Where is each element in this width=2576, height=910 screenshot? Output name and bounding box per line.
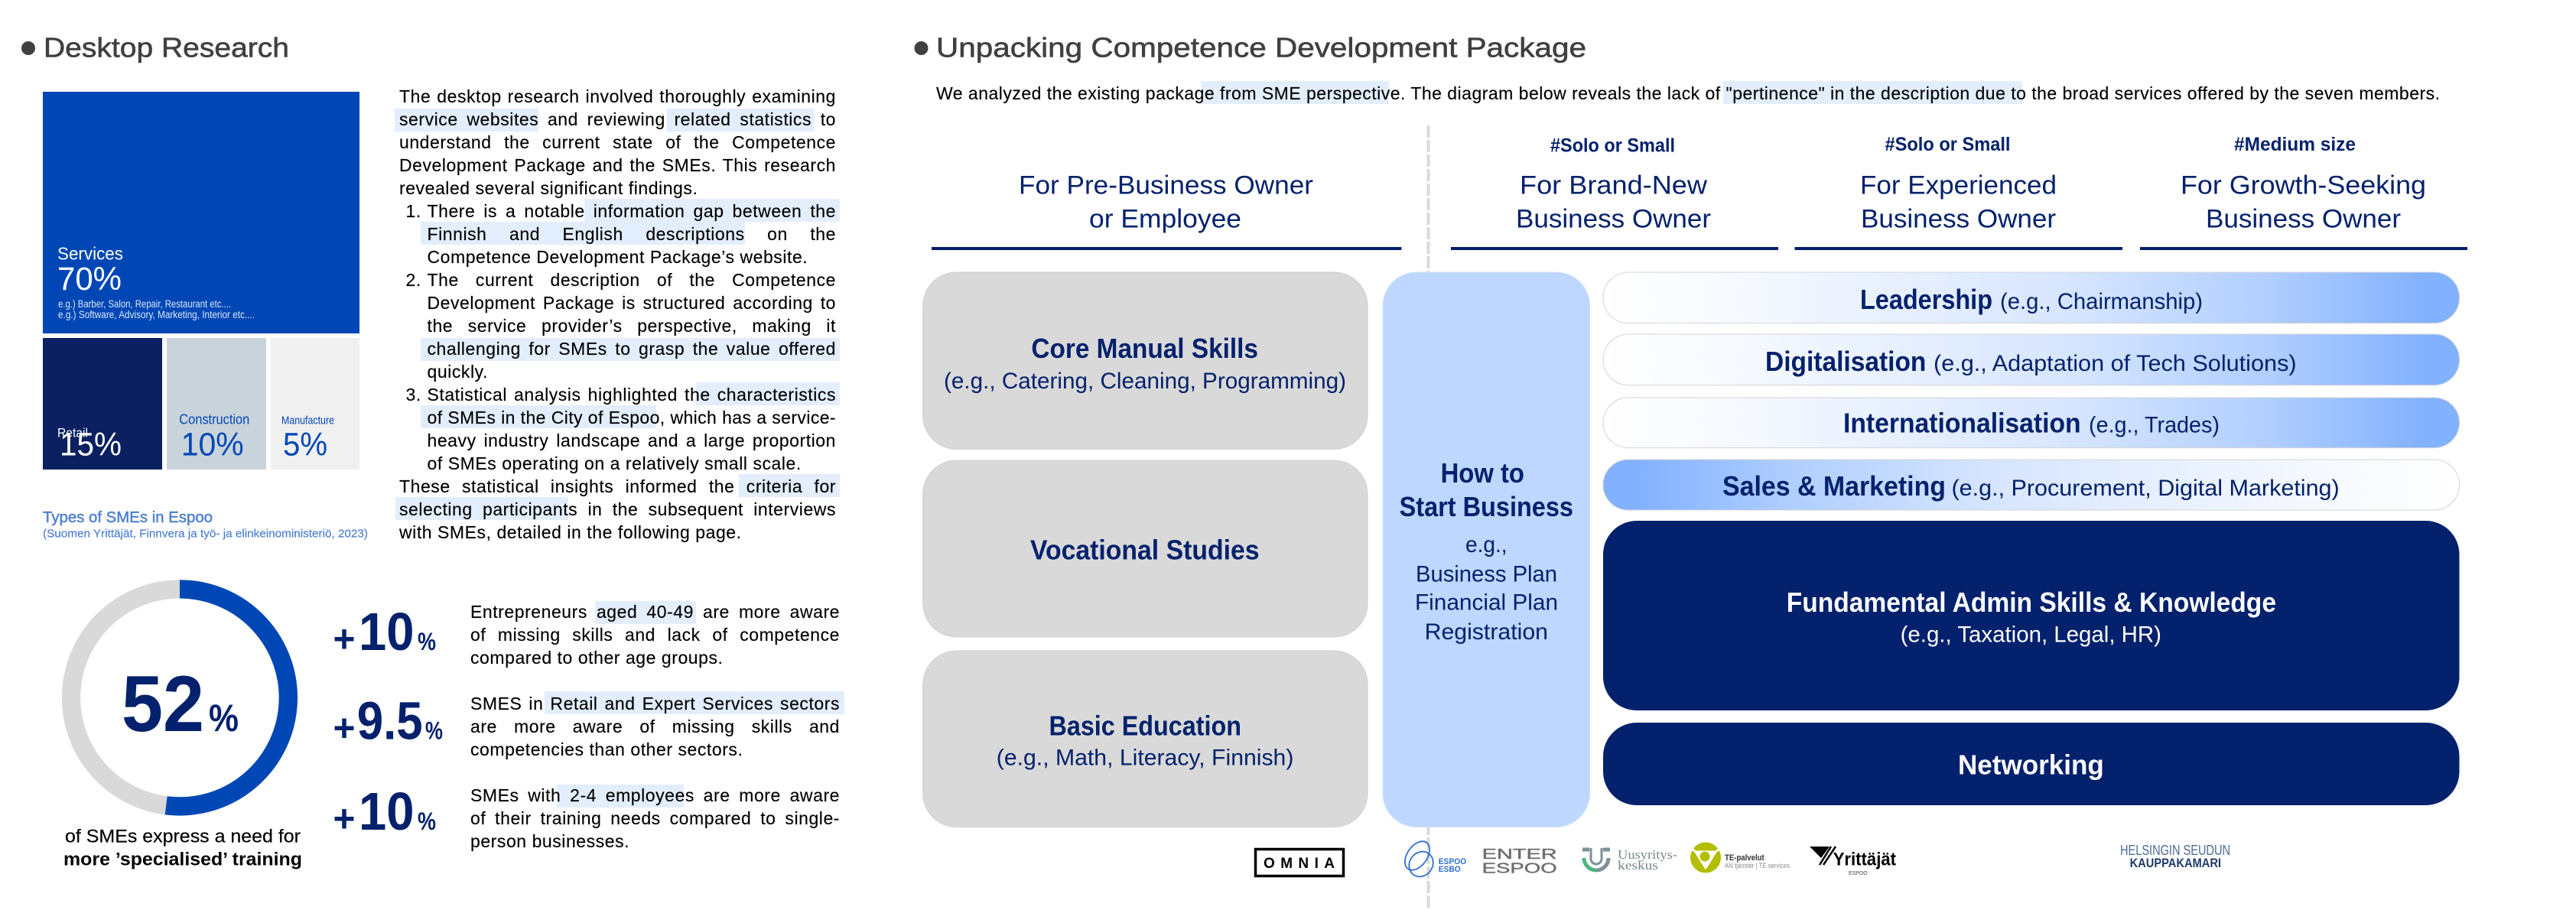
pill: leadership [1603, 272, 2460, 323]
statistic: +10% employees: % [418, 808, 436, 835]
text block: desktop research findings: The current description of the Competence [427, 269, 836, 289]
text block: sector statistic [470, 694, 840, 760]
text block: age group statistic [470, 602, 840, 668]
panel: vocational studies [923, 460, 1368, 637]
dashed divider [1427, 125, 1430, 910]
pill: digitalisation [1603, 334, 2460, 385]
text block: desktop research findings: challenging for SMEs to grasp the value offered [427, 338, 836, 358]
text block: desktop research findings: selecting participants in the subsequent interviews [399, 499, 836, 518]
logo: Espoo: ESPOO [1439, 857, 1467, 866]
text block: age group statistic: of missing skills and lack of competence [470, 625, 840, 645]
treemap cell: retail 15% [43, 338, 162, 470]
logo: Helsingin Seudun Kauppakamari: KAUPPAKAMARI [2130, 856, 2221, 870]
logo: Enter Espoo [1482, 847, 1557, 876]
text block: desktop research findings: The desktop research involved thoroughly examining [399, 86, 836, 106]
column header: brand-new business owner: Business Owner [1516, 205, 1711, 234]
pill: sales and marketing: (e.g., Procurement, Digital Marketing) [1952, 476, 2340, 501]
statistic: +9.5% sectors: 9.5 [357, 691, 423, 751]
column header: growth-seeking business owner: For Growth-Seeking [2181, 171, 2426, 200]
treemap caption: (Suomen Yrittäjät, Finnvera ja työ- ja elinkeinoministeriö, 2023) [43, 527, 368, 540]
column header: brand-new business owner [1451, 135, 1778, 250]
column header: pre-business owner [932, 171, 1401, 250]
panel: basic education: (e.g., Math, Literacy, Finnish) [997, 746, 1293, 771]
treemap cell: services 70%: e.g.) Barber, Salon, Repair, Restaurant etc.... [58, 298, 231, 310]
logo: Yrittajat Espoo [1810, 847, 1896, 876]
panel: how to start business [1383, 272, 1590, 827]
column header: growth-seeking business owner: Business Owner [2206, 205, 2401, 234]
panel: basic education: Basic Education [1049, 710, 1241, 742]
panel: fundamental admin skills and knowledge [1603, 521, 2460, 710]
treemap cell: retail 15%: 15% [60, 427, 122, 463]
pill: digitalisation: Digitalisation [1765, 346, 1926, 377]
panel: fundamental admin skills and knowledge: (e.g., Taxation, Legal, HR) [1901, 622, 2161, 648]
pill: leadership: Leadership [1860, 284, 1992, 315]
logo: Helsingin Seudun Kauppakamari [2120, 843, 2230, 870]
panel: how to start business: e.g., [1465, 532, 1508, 557]
text block: sector statistic: SMES in Retail and Expert Services sectors [470, 694, 840, 713]
text block: age group statistic: Entrepreneurs aged 40-49 are more aware [470, 602, 840, 622]
text block: desktop research findings: Competence Development Package’s website. [427, 246, 808, 266]
statistic: +10% age: % [418, 628, 436, 655]
text block: desktop research findings: heavy industry landscape and a large proportion [427, 430, 836, 450]
logo: Yrittajat Espoo: Yrittäjät [1833, 850, 1896, 870]
logo: Helsingin Seudun Kauppakamari: HELSINGIN SEUDUN [2120, 843, 2230, 858]
text block: desktop research findings [399, 86, 836, 543]
donut chart: 52%: 52 [122, 660, 204, 749]
logo: TE-palvelut: TE-palvelut [1725, 853, 1764, 863]
logo: Uusyrityskeskus: keskus [1618, 858, 1658, 873]
statistic: +10% employees [333, 782, 436, 841]
text block: desktop research findings: the service provider’s perspective, making it [427, 315, 836, 335]
panel: how to start business: Business Plan [1416, 562, 1557, 587]
text block: sector statistic: competencies than other sectors. [470, 739, 743, 759]
text block: desktop research findings: understand the current state of the Competence [399, 132, 836, 151]
text highlights: package intro [1201, 81, 2022, 104]
statistic: +9.5% sectors: % [425, 717, 443, 745]
logo: Uusyrityskeskus [1582, 847, 1677, 873]
statistic: +10% employees: 10 [359, 782, 415, 841]
package intro text: We analyzed the existing package from SME perspective. The diagram below reveals the lack of "pertinence" in the description due to the broad services offered by the seven members. [936, 83, 2440, 103]
text block: desktop research findings: 3. [405, 384, 421, 404]
text block: desktop research findings: of SMEs operating on a relatively small scale. [427, 453, 802, 473]
text block: desktop research findings: revealed several significant findings. [399, 177, 698, 197]
donut chart: 52% [71, 589, 288, 806]
panel: networking: Networking [1958, 749, 2104, 781]
text block: desktop research findings: 2. [405, 269, 421, 289]
panel: core manual skills: (e.g., Catering, Cleaning, Programming) [944, 369, 1346, 394]
treemap cell: manufacture 5%: 5% [283, 427, 327, 463]
treemap: types of SMEs in Espoo [43, 92, 359, 470]
column header: experienced business owner: Business Owner [1861, 205, 2056, 234]
text block: desktop research findings: of SMEs in the City of Espoo, which has a service- [427, 407, 836, 427]
logo: Uusyrityskeskus: Uusyritys- [1618, 847, 1677, 862]
text block: desktop research findings: 1. [405, 200, 421, 220]
heading: Unpacking Competence Development Package: Unpacking Competence Development Package [936, 32, 1586, 63]
pill: sales and marketing: Sales & Marketing [1722, 470, 1946, 502]
panel: how to start business: Registration [1425, 619, 1548, 645]
text block: desktop research findings: Finnish and English descriptions on the [427, 223, 836, 243]
donut caption [63, 827, 302, 870]
pill: digitalisation: (e.g., Adaptation of Tech Solutions) [1934, 351, 2297, 376]
statistic: +10% age [333, 602, 436, 661]
logo: TE-palvelut [1689, 843, 1790, 873]
panel: core manual skills: Core Manual Skills [1031, 333, 1258, 364]
pill: leadership: (e.g., Chairmanship) [2000, 289, 2203, 314]
pill: internationalisation [1603, 398, 2460, 448]
logo: Enter Espoo: ENTER [1482, 847, 1557, 862]
text block: desktop research findings: quickly. [427, 361, 488, 381]
statistic: +10% employees: + [333, 797, 355, 840]
statistic: +9.5% sectors: + [333, 707, 355, 749]
text block: desktop research findings: service websites and reviewing related statistics to [399, 109, 836, 128]
text block: employee statistic: person businesses. [470, 831, 629, 851]
logo: Enter Espoo: ESPOO [1482, 861, 1557, 876]
statistic: +10% age: + [333, 618, 355, 661]
logo: Espoo: ESBO [1439, 865, 1461, 874]
treemap cell: retail 15%: Retail [57, 425, 88, 440]
column header: pre-business owner: or Employee [1089, 205, 1241, 234]
text block: employee statistic: SMEs with 2-4 employees are more aware [470, 785, 840, 805]
pill: internationalisation: Internationalisation [1843, 408, 2081, 439]
pill: internationalisation: (e.g., Trades) [2089, 413, 2220, 438]
text block: age group statistic: compared to other age groups. [470, 648, 723, 668]
treemap caption: Types of SMEs in Espoo [43, 509, 213, 526]
panel: networking [1603, 723, 2460, 805]
treemap cell: manufacture 5%: Manufacture [281, 414, 334, 427]
panel: core manual skills [923, 272, 1368, 450]
donut chart: 52%: % [209, 697, 239, 739]
text block: desktop research findings: Statistical analysis highlighted the characteristics [427, 384, 836, 404]
treemap cell: manufacture 5% [271, 338, 359, 470]
column header: brand-new business owner: #Solo or Small [1550, 135, 1675, 157]
logo: Yrittajat Espoo: ESPOO [1849, 871, 1868, 876]
statistic: +10% age: 10 [359, 602, 415, 661]
statistic: +9.5% sectors [333, 691, 443, 751]
column header: experienced business owner: For Experienced [1860, 171, 2057, 200]
column header: growth-seeking business owner [2140, 134, 2467, 250]
panel: how to start business: Start Business [1400, 491, 1573, 522]
treemap cell: construction 10%: Construction [179, 411, 249, 427]
heading: Desktop Research: Desktop Research [44, 32, 289, 63]
panel: basic education [923, 651, 1368, 827]
treemap caption [43, 509, 368, 540]
pill: sales and marketing [1603, 460, 2460, 510]
panel: how to start business: How to [1441, 457, 1524, 489]
text highlights: statistics descriptions [545, 601, 844, 808]
treemap cell: services 70%: 70% [57, 261, 122, 297]
logo: Espoo [1400, 837, 1467, 882]
logo: Omnia [1256, 849, 1343, 876]
text block: desktop research findings: Development Package is structured according to [427, 292, 836, 312]
column header: experienced business owner [1794, 134, 2122, 250]
text block: desktop research findings: These statistical insights informed the criteria for [399, 476, 836, 496]
panel: vocational studies: Vocational Studies [1030, 535, 1259, 566]
treemap cell: construction 10% [167, 338, 266, 470]
treemap cell: construction 10%: 10% [181, 427, 244, 463]
donut caption: more ’specialised’ training [63, 850, 302, 870]
text block: desktop research findings: There is a notable information gap between the [427, 200, 836, 220]
column header: growth-seeking business owner: #Medium size [2234, 134, 2356, 155]
treemap cell: services 70%: e.g.) Software, Advisory, Marketing, Interior etc.... [58, 309, 255, 320]
treemap cell: services 70% [43, 92, 359, 333]
panel: fundamental admin skills and knowledge: Fundamental Admin Skills & Knowledge [1787, 587, 2276, 618]
text block: employee statistic: of their training needs compared to single- [470, 808, 840, 828]
column header: experienced business owner: #Solo or Small [1885, 134, 2010, 155]
text block: desktop research findings: with SMEs, detailed in the following page. [399, 522, 742, 541]
logo: TE-palvelut: AN tjänster | TE services [1725, 862, 1790, 870]
treemap cell: services 70%: Services [57, 243, 123, 263]
text block: sector statistic: are more aware of missing skills and [470, 717, 840, 736]
text block: desktop research findings: Development Package and the SMEs. This research [399, 154, 836, 174]
logo: Omnia: OMNIA [1264, 856, 1335, 872]
text highlights: desktop research paragraph [395, 109, 840, 520]
column header: pre-business owner: For Pre-Business Owner [1019, 171, 1313, 200]
donut caption: of SMEs express a need for [65, 827, 301, 847]
text block: employee statistic [470, 785, 840, 852]
column header: brand-new business owner: For Brand-New [1520, 171, 1707, 200]
panel: how to start business: Financial Plan [1415, 590, 1558, 615]
